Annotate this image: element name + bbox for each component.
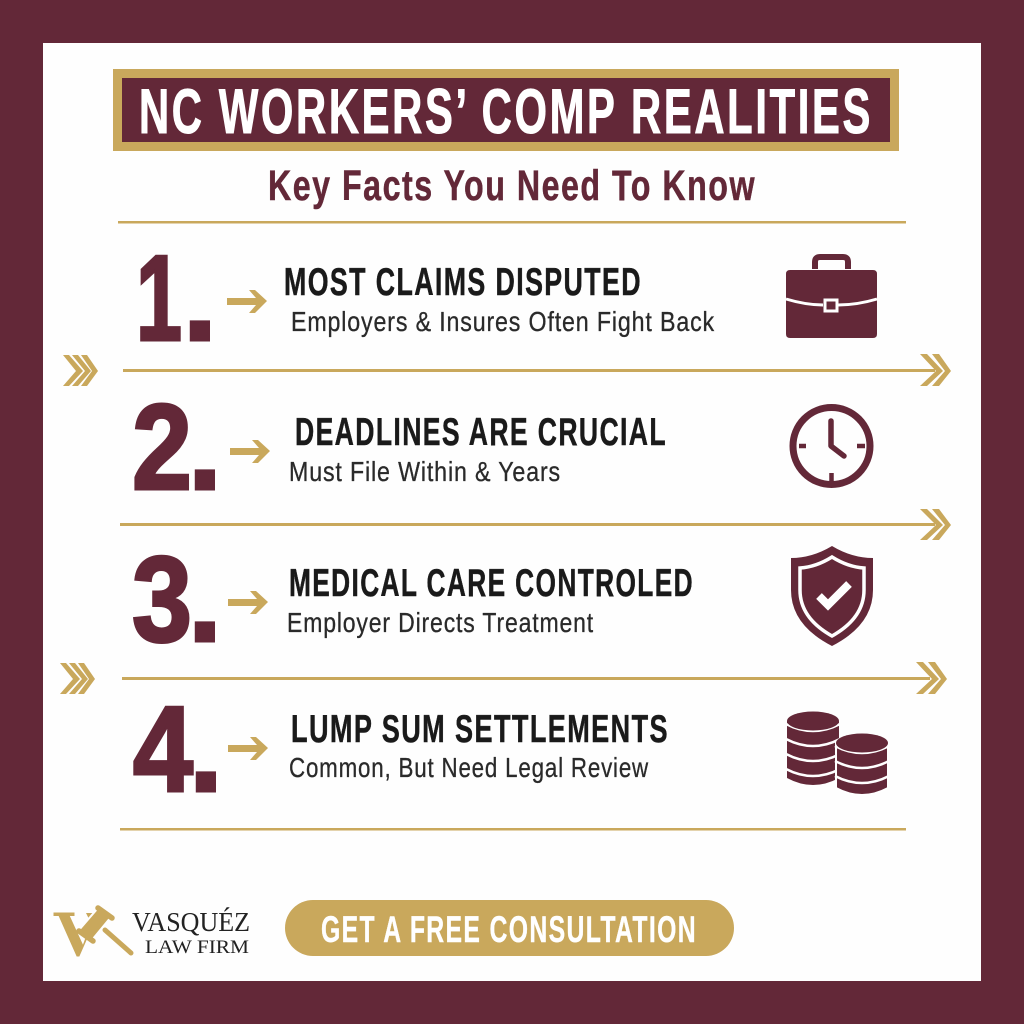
description 3: Employer Directs Treatment [287, 607, 594, 638]
item 1: most claims disputed [136, 230, 877, 366]
icon: clock [793, 408, 870, 484]
item 2: deadlines [132, 379, 870, 515]
divider arrow 2 with chevrons [120, 509, 951, 540]
arrow 3 [228, 591, 268, 614]
item 3: medical care [132, 531, 873, 667]
heading 1: MOST CLAIMS DISPUTED [284, 261, 642, 304]
divider arrow 3 with chevrons [60, 662, 947, 694]
number 2: 2 [132, 379, 192, 515]
icon: briefcase [786, 257, 877, 338]
number 1: . [183, 230, 217, 366]
wordmark: VASQUÉZ [132, 907, 250, 937]
subtitle: Key Facts You Need To Know [268, 162, 756, 210]
icon: shield with check [791, 546, 873, 646]
arrow 2 [230, 440, 270, 463]
heading 2: DEADLINES ARE CRUCIAL [295, 411, 667, 454]
logo: Vasquez Law Firm [54, 907, 250, 958]
number 3: 3 [132, 531, 192, 667]
number 2: . [188, 379, 222, 515]
heading 4: LUMP SUM SETTLEMENTS [291, 708, 669, 751]
number 4: 4 [133, 681, 193, 817]
divider arrow 1 with chevrons [63, 354, 951, 386]
logo: Vasquez Law Firm: LAW FIRM [145, 937, 249, 958]
number 1: 1 [136, 230, 182, 366]
description 2: Must File Within & Years [289, 456, 561, 487]
number 4: . [189, 681, 223, 817]
call to action button: GET A FREE CONSULTATION [321, 909, 697, 950]
item 4: lump sum [133, 681, 889, 817]
call to action button [285, 900, 734, 956]
arrow 4 [228, 737, 268, 760]
number 3: . [188, 531, 222, 667]
heading 3: MEDICAL CARE CONTROLED [289, 562, 694, 605]
arrow 1 [227, 290, 267, 313]
description 4: Common, But Need Legal Review [289, 752, 649, 783]
icon: gavel over V [54, 908, 131, 956]
description 1: Employers & Insures Often Fight Back [291, 306, 715, 337]
icon: coin stacks [786, 712, 889, 795]
